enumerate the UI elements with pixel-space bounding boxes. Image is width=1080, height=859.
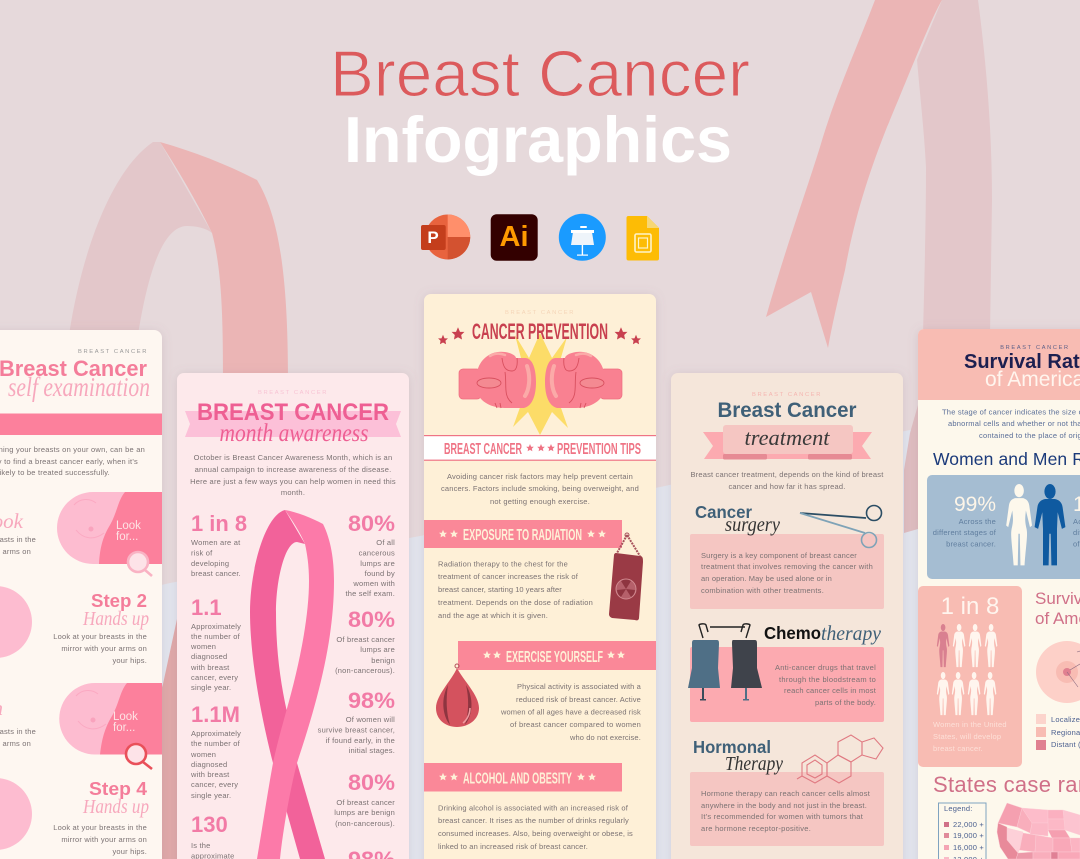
stat: 130: 130 — [191, 812, 228, 837]
pink 1 in 8 panel: Women in the United — [933, 720, 1007, 729]
stat: 1.1M — [190, 702, 241, 800]
step 4: mirror with your arms on — [61, 835, 147, 844]
stat: 80% benign repeat: (non-cancerous). — [335, 819, 395, 828]
stat: 80% benign: Of breast cancer — [336, 635, 395, 644]
pink 1 in 8 panel: breast cancer. — [933, 744, 983, 753]
stat: 1.1: with breast — [190, 663, 230, 672]
stat: 1.1: single year. — [191, 683, 231, 692]
kicker: BREAST CANCER — [752, 392, 822, 398]
blue rate panel: 99% — [954, 493, 996, 516]
stat: 1.1M: with breast — [190, 770, 230, 779]
heading — [0, 356, 150, 402]
stat: 80% benign: lumps are — [360, 645, 395, 654]
icon: Google Slides — [626, 216, 659, 260]
alcohol text: breast cancer. It rises as the number of drinks regularly — [438, 816, 629, 825]
stat: 80% benign: (non-cancerous). — [335, 666, 395, 675]
illustration: breast circle 1 — [0, 586, 32, 658]
left boxing glove — [459, 352, 536, 408]
surgery text — [701, 551, 873, 595]
step 3 text: arms on — [2, 739, 31, 748]
stat: 80% benign: 80% — [348, 607, 395, 632]
stat: 80% benign repeat: Of breast cancer — [336, 798, 395, 807]
heading: hormonal therapy: Hormonal — [693, 737, 771, 757]
chart legend — [1036, 714, 1080, 750]
map legend — [938, 803, 986, 859]
intro text: October is Breast Cancer Awareness Month, which is an — [194, 453, 392, 462]
chemotherapy text — [775, 663, 877, 707]
blue rate panel: breast cancer. — [946, 539, 996, 548]
intro text: Avoiding cancer risk factors may help prevent certain — [447, 472, 633, 481]
right boxing glove — [545, 352, 622, 408]
stat: 1.1: cancer, every — [191, 673, 238, 682]
step 2: Look at your breasts in the — [53, 632, 147, 641]
ribbon banner: treatment — [744, 425, 830, 450]
panel: self examination — [0, 330, 162, 859]
alcohol text — [438, 804, 633, 851]
exercise text: who do not exercise. — [569, 733, 641, 742]
illustration: look for 1: for... — [116, 531, 138, 543]
illustration: look for 1 — [57, 492, 162, 576]
radiation text: treatment. Depends on the dose of radiation — [438, 598, 593, 607]
map — [997, 803, 1080, 859]
stat: 1 in 8 — [191, 511, 247, 578]
map legend: 19,000 + — [953, 831, 984, 840]
surgery text: treatment that involves removing the cancer with — [701, 562, 873, 571]
step 1 text — [0, 509, 36, 556]
header block — [918, 329, 1080, 400]
stat: 1.1M: single year. — [191, 791, 231, 800]
heading: hormonal therapy — [693, 737, 783, 775]
stat: 80% benign repeat: lumps are benign — [334, 808, 395, 817]
illustration: look for 2: Look — [113, 711, 138, 723]
icon: man figure — [1035, 484, 1065, 565]
intro text — [190, 453, 396, 497]
stat: 1.1M: diagnosed — [191, 760, 227, 769]
map legend: 16,000 + — [953, 843, 984, 852]
blue rate panel — [927, 475, 1080, 579]
banner — [185, 411, 401, 437]
stat: 1.1M: cancer, every — [191, 780, 238, 789]
panel: survival rates — [918, 329, 1080, 859]
icon: steroid molecule — [797, 735, 883, 783]
step 3 text: asts in the — [0, 727, 36, 736]
stat: 80% self exam: women with — [352, 579, 395, 588]
stat: 130: Is the — [191, 841, 211, 850]
title: Infographics — [344, 103, 732, 176]
stat: 1.1M: women — [190, 750, 216, 759]
heading: self examination — [8, 372, 150, 402]
step 1 text: asts in the — [0, 535, 36, 544]
box: chemotherapy — [690, 647, 884, 722]
stat: 1 in 8: 1 in 8 — [191, 511, 247, 536]
hormonal text: Hormone therapy can reach cancer cells almost — [701, 789, 871, 798]
band: alcohol and obesity — [424, 763, 622, 792]
intro text: Breast cancer treatment, depends on the kind of breast — [690, 470, 884, 479]
intro text — [690, 470, 884, 491]
exercise text — [500, 682, 642, 742]
alcohol text: linked to an increased risk of breast cancer. — [438, 842, 588, 851]
stat: 98% survive: 98% — [348, 688, 395, 713]
icon: woman figure — [1006, 484, 1032, 565]
stat: 1.1: 1.1 — [191, 595, 222, 620]
box: hormonal — [690, 772, 884, 846]
awareness ribbon — [250, 510, 334, 859]
stat: 80% self exam — [346, 511, 395, 598]
stat: 1 in 8: developing — [191, 559, 229, 568]
step 4 — [53, 779, 149, 856]
stat: 1.1M: Approximately — [191, 729, 241, 738]
blue rate panel: Across the — [959, 517, 996, 526]
exercise text: Physical activity is associated with a — [517, 682, 642, 691]
band: exposure to radiation: EXPOSURE TO RADIATION — [463, 527, 582, 544]
stat: 1 in 8: risk of — [191, 548, 213, 558]
icon: scissors — [800, 506, 882, 548]
icon: Illustrator — [491, 214, 538, 261]
surgery text: combination with other treatments. — [701, 586, 824, 595]
blue rate panel: different stages of — [933, 528, 997, 537]
stat: 1.1: the number of — [191, 632, 241, 641]
title — [330, 38, 750, 176]
step 3 text — [0, 696, 36, 748]
intro text — [0, 445, 145, 477]
icon: punching bag — [609, 533, 643, 620]
icon: PowerPoint: P — [427, 228, 439, 247]
chemotherapy text: through the bloodstream to — [779, 675, 876, 684]
map legend: Legend: — [944, 804, 973, 813]
heading: BREAST CANCER — [197, 399, 389, 426]
illustration: look for 2 — [59, 683, 162, 769]
panel: month awareness — [177, 373, 409, 859]
white tips banner: BREAST CANCER — [444, 441, 522, 458]
heading: chemotherapy: therapy — [821, 621, 882, 645]
chemotherapy text: parts of the body. — [815, 698, 876, 707]
stat: 1.1: women — [190, 642, 216, 651]
surgery text: an operation. May be used alone or in — [701, 574, 832, 583]
kicker: BREAST CANCER — [78, 349, 148, 355]
heading: Breast Cancer — [718, 398, 857, 422]
box: surgery — [690, 534, 884, 609]
stat: 80% benign repeat — [334, 770, 395, 828]
intro text: Here are just a few ways you can help women in need this — [190, 477, 396, 486]
hormonal text — [701, 789, 871, 833]
step 1 text: arms on — [2, 547, 31, 556]
intro text: abnormal cells and whether or not that — [948, 419, 1080, 428]
exercise text: reduced risk of breast cancer. Active — [516, 695, 641, 704]
heading — [964, 351, 1080, 391]
alcohol text: consumed increases. Also, being overweight or obese, is — [438, 829, 633, 838]
stat: 98% survive: survive breast cancer, — [318, 726, 395, 734]
radiation text: Radiation therapy to the chest for the — [438, 560, 568, 568]
band: exercise yourself — [458, 641, 656, 670]
stars — [438, 327, 641, 344]
alcohol text: Drinking alcohol is associated with an increased risk of — [438, 804, 629, 813]
intro text: month. — [281, 488, 305, 497]
radiation text — [438, 560, 593, 620]
stat: 98% survive: Of women will — [346, 715, 395, 724]
heading: chemotherapy — [764, 621, 882, 645]
ribbon banner — [703, 425, 872, 460]
chart legend: Distant ( — [1051, 740, 1080, 749]
icon: Illustrator: Ai — [500, 221, 528, 253]
stat: 80% self exam: lumps are — [360, 559, 395, 568]
hormonal text: are hormone receptor-positive. — [701, 824, 811, 833]
stat: 1.1 — [190, 595, 241, 692]
stat: 98% survive — [318, 688, 395, 755]
chemotherapy text: Anti-cancer drugs that travel — [775, 663, 876, 672]
stat: 1.1: Approximately — [191, 622, 241, 631]
kicker: BREAST CANCER — [1000, 345, 1070, 351]
radiation text: treatment of cancer increases the risk of — [438, 572, 579, 581]
heading: cancer surgery — [695, 502, 780, 536]
stat: 1 in 8: Women are at — [191, 538, 241, 547]
icon: speed bag — [436, 664, 479, 727]
stat: 80% self exam: the self exam. — [346, 589, 395, 598]
stat: 98% survive: initial stages. — [349, 746, 395, 755]
icon: PowerPoint — [421, 214, 470, 260]
stat: 1.1M: the number of — [191, 739, 241, 748]
starburst — [513, 333, 568, 435]
stat: 80% benign — [335, 607, 395, 675]
step 2: Step 2 — [91, 591, 147, 611]
chemotherapy text: reach cancer cells in most — [784, 686, 877, 695]
heading — [197, 399, 389, 447]
chart: stage circles — [1036, 641, 1080, 703]
illustration: look for 1: Look — [116, 520, 141, 532]
radiation text: breast cancer, starting 10 years after — [438, 585, 562, 594]
white tips banner: PREVENTION TIPS — [557, 441, 641, 458]
survival heading — [1035, 589, 1080, 628]
step 4: Look at your breasts in the — [53, 823, 147, 832]
step 4: Hands up — [82, 796, 149, 818]
illustration: breast circle 2 — [0, 778, 32, 850]
heading: cancer surgery: surgery — [725, 514, 780, 536]
band: exercise yourself: EXERCISE YOURSELF — [506, 649, 603, 666]
step 4: your hips. — [112, 847, 147, 856]
surgery text: Surgery is a key component of breast cancer — [701, 551, 857, 560]
stat: 80% self exam: Of all — [376, 538, 395, 547]
right background ribbon — [766, 0, 992, 533]
pink 1 in 8 panel: States, will develop — [933, 732, 1001, 741]
intro text: annual campaign to increase awareness of the disease. — [195, 465, 391, 474]
stat: 1.1M: 1.1M — [191, 702, 240, 727]
step 2 — [53, 591, 149, 665]
illustration: look for 2: for... — [113, 722, 135, 734]
white tips banner — [424, 435, 656, 461]
stat: 130 — [191, 812, 234, 859]
heading: Breast Cancer — [0, 356, 147, 381]
radiation text: and the age at which it is given. — [438, 611, 548, 620]
stat: 80% benign repeat: 80% — [348, 770, 395, 795]
band: alcohol and obesity: ALCOHOL AND OBESITY — [463, 770, 572, 788]
heading: CANCER PREVENTION — [472, 319, 608, 344]
panel: cancer prevention — [424, 294, 656, 859]
step 2: your hips. — [112, 656, 147, 665]
step 4: Step 4 — [89, 779, 147, 799]
exercise text: women of all ages have a decreased risk — [500, 708, 641, 716]
title: Breast Cancer — [330, 38, 750, 110]
pink 1 in 8 panel — [918, 586, 1022, 767]
step 2: mirror with your arms on — [61, 644, 147, 653]
stat: 1 in 8: breast cancer. — [191, 569, 241, 578]
intro text: not getting enough exercise. — [490, 497, 590, 506]
band: exposure to radiation — [424, 520, 622, 548]
icon: IV bags — [688, 624, 762, 700]
stat: 80% self exam: cancerous — [359, 548, 395, 558]
stat: 98% survive: if found early, in the — [326, 736, 395, 745]
exercise text: of breast cancer compared to women — [510, 720, 641, 729]
step 2: Hands up — [82, 608, 149, 630]
stat: 80% self exam: found by — [365, 569, 395, 578]
pink bar — [0, 414, 162, 435]
hormonal text: It's recommended for women with tumors that — [701, 812, 864, 821]
stat: 80% benign: benign — [371, 656, 395, 665]
hormonal text: anywhere in the body and not just in the breast. — [701, 801, 867, 810]
kicker: BREAST CANCER — [505, 310, 575, 316]
heading: month awareness — [220, 420, 368, 447]
stat: 1.1: diagnosed — [191, 652, 227, 661]
pink 1 in 8 panel: 1 in 8 — [941, 593, 999, 620]
heading: hormonal therapy: Therapy — [725, 753, 783, 775]
heading: cancer surgery: Cancer — [695, 502, 752, 522]
map legend: 22,000 + — [953, 820, 984, 829]
stat: 80% self exam: 80% — [348, 511, 395, 536]
intro text — [942, 408, 1080, 440]
heading: chemotherapy: Chemo — [764, 623, 821, 643]
panel: treatment — [671, 373, 903, 859]
intro text: cancer and how far it has spread. — [728, 482, 846, 491]
left background ribbon — [69, 142, 288, 859]
intro text: cancers. Factors include smoking, being overweight, and — [441, 484, 639, 493]
icon: Keynote — [559, 214, 606, 261]
kicker: BREAST CANCER — [258, 390, 328, 396]
intro text — [441, 472, 639, 506]
